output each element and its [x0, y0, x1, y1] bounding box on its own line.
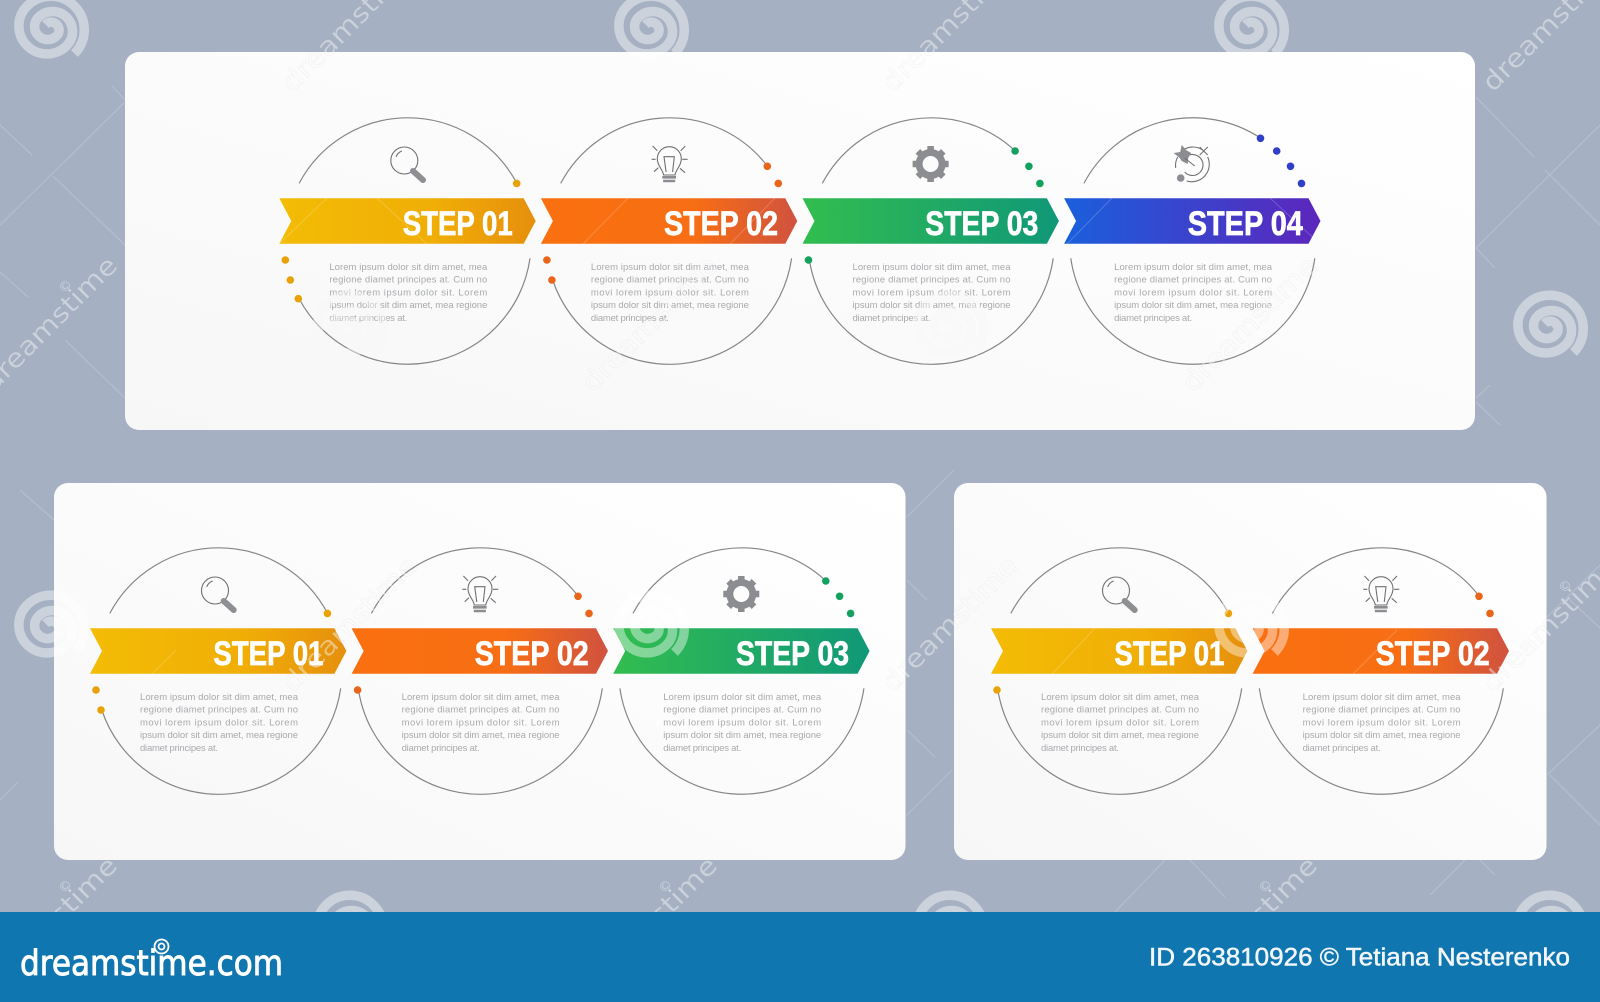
watermark text: ©: [356, 577, 376, 597]
arrow: [802, 198, 1059, 244]
arrow: [1253, 628, 1509, 674]
body text: [663, 692, 822, 754]
body text: [1303, 692, 1461, 754]
panel: three steps: [54, 483, 906, 860]
dots: [354, 592, 593, 694]
watermark text: ©: [56, 277, 76, 297]
arrow: [991, 628, 1247, 674]
watermark text: ©: [56, 877, 76, 897]
body text: regione diamet principes at. Cum no: [140, 705, 298, 716]
body text: diamet principes at.: [663, 743, 741, 754]
body text: diamet principes at.: [329, 313, 407, 324]
body text: movi lorem ipsum dolor sit. Lorem: [329, 287, 487, 298]
body text: Lorem ipsum dolor sit dim amet, mea: [329, 262, 488, 273]
body text: Lorem ipsum dolor sit dim amet, mea: [402, 692, 560, 703]
footer banner: [0, 912, 1600, 1002]
body text: Lorem ipsum dolor sit dim amet, mea: [591, 262, 750, 273]
lower arc: [809, 258, 1053, 364]
upper arc: [371, 548, 578, 613]
step 03: [802, 118, 1059, 364]
body text: regione diamet principes at. Cum no: [1114, 275, 1272, 286]
step 01: [279, 118, 536, 364]
lower arc: [1259, 688, 1503, 794]
image id and credit: ID 263810926 © Tetiana Nesterenko: [1149, 944, 1570, 972]
watermark text: ©: [1256, 277, 1276, 297]
upper arc: [633, 548, 826, 613]
body text: movi lorem ipsum dolor sit. Lorem: [1114, 287, 1272, 298]
watermark text: ©: [1556, 577, 1576, 597]
upper arc: [1011, 548, 1229, 613]
body text: movi lorem ipsum dolor sit. Lorem: [140, 717, 298, 728]
body text: [1041, 692, 1200, 754]
logo spiral: [154, 940, 168, 954]
body text: diamet principes at.: [1303, 743, 1381, 754]
body text: regione diamet principes at. Cum no: [663, 705, 821, 716]
watermark text: dreamstime: [877, 551, 1024, 698]
arrow: [279, 198, 536, 244]
body text: Lorem ipsum dolor sit dim amet, mea: [853, 262, 1011, 273]
dots: [822, 577, 854, 617]
body text: diamet principes at.: [1041, 743, 1119, 754]
body text: [329, 262, 488, 324]
lower arc: [358, 688, 602, 794]
step 02: [1253, 548, 1509, 794]
icon: light bulb: [652, 146, 688, 181]
dots: [92, 610, 331, 714]
arrow: [352, 628, 608, 674]
body text: movi lorem ipsum dolor sit. Lorem: [853, 287, 1011, 298]
lower arc: [998, 688, 1242, 794]
body text: [591, 262, 750, 324]
icon: gear: [913, 146, 949, 182]
upper arc: [1084, 118, 1261, 183]
body text: ipsum dolor sit dim amet, mea regione: [1114, 300, 1272, 311]
body text: movi lorem ipsum dolor sit. Lorem: [663, 717, 821, 728]
lower arc: [553, 258, 792, 364]
watermark text: dreamstime: [277, 551, 424, 698]
body text: [1114, 262, 1273, 324]
upper arc: [299, 118, 517, 183]
watermark text: ©: [1256, 877, 1276, 897]
step label: STEP 03: [736, 635, 849, 673]
icon: light bulb: [462, 576, 498, 611]
watermark text: dreamstime: [577, 251, 724, 398]
dots: [543, 162, 782, 284]
body text: ipsum dolor sit dim amet, mea regione: [853, 300, 1011, 311]
panel: two steps: [954, 483, 1546, 860]
panel background: [125, 52, 1475, 430]
body text: regione diamet principes at. Cum no: [591, 275, 749, 286]
body text: regione diamet principes at. Cum no: [853, 275, 1011, 286]
body text: ipsum dolor sit dim amet, mea regione: [140, 730, 298, 741]
icon: target with dart: [1174, 145, 1209, 182]
dots: [993, 610, 1232, 694]
step label: STEP 02: [475, 635, 589, 673]
body text: regione diamet principes at. Cum no: [402, 705, 560, 716]
watermark text: dreamstime: [1177, 251, 1324, 398]
body text: Lorem ipsum dolor sit dim amet, mea: [1114, 262, 1273, 273]
step label: STEP 01: [403, 205, 513, 243]
upper arc: [1272, 548, 1479, 613]
icon: magnifier: [202, 577, 234, 610]
body text: [852, 262, 1011, 324]
body text: diamet principes at.: [140, 743, 218, 754]
body text: ipsum dolor sit dim amet, mea regione: [329, 300, 487, 311]
body text: Lorem ipsum dolor sit dim amet, mea: [1303, 692, 1461, 703]
arrow: [90, 628, 346, 674]
watermark text: dreamstime: [577, 851, 724, 998]
body text: ipsum dolor sit dim amet, mea regione: [1303, 730, 1461, 741]
arrow: [613, 628, 870, 674]
banner background: [0, 912, 1600, 1002]
upper arc: [561, 118, 768, 183]
body text: ipsum dolor sit dim amet, mea regione: [402, 730, 560, 741]
body text: regione diamet principes at. Cum no: [1303, 705, 1461, 716]
faint spiral marks on panel: [306, 281, 997, 372]
body text: diamet principes at.: [591, 313, 669, 324]
body text: movi lorem ipsum dolor sit. Lorem: [591, 287, 749, 298]
panel background: [954, 483, 1546, 860]
body text: diamet principes at.: [402, 743, 480, 754]
watermark text: dreamstime: [1177, 851, 1324, 998]
logo text: dreamstime.com: [20, 944, 283, 984]
step label: STEP 01: [213, 635, 323, 673]
body text: [402, 692, 560, 754]
step 03: [613, 548, 870, 794]
body text: diamet principes at.: [853, 313, 931, 324]
watermark text: ©: [656, 277, 676, 297]
body text: movi lorem ipsum dolor sit. Lorem: [1303, 717, 1461, 728]
body text: movi lorem ipsum dolor sit. Lorem: [1041, 717, 1199, 728]
step 04: [1064, 118, 1320, 364]
body text: ipsum dolor sit dim amet, mea regione: [1041, 730, 1199, 741]
icon: gear: [723, 576, 759, 612]
dots: [282, 180, 520, 302]
step 02: [352, 548, 608, 794]
body text: Lorem ipsum dolor sit dim amet, mea: [1041, 692, 1200, 703]
watermark text: ©: [656, 877, 676, 897]
icon: magnifier: [1102, 577, 1135, 610]
lower arc: [1071, 258, 1315, 364]
icon: magnifier: [391, 147, 423, 180]
step 01: [90, 548, 346, 794]
body text: regione diamet principes at. Cum no: [1041, 705, 1199, 716]
step label: STEP 04: [1188, 205, 1303, 243]
upper arc: [822, 118, 1015, 183]
watermark text: ©: [956, 577, 976, 597]
lower arc: [102, 688, 341, 794]
body text: ipsum dolor sit dim amet, mea regione: [591, 300, 749, 311]
step label: STEP 02: [664, 205, 778, 243]
body text: diamet principes at.: [1114, 313, 1192, 324]
panel background: [54, 483, 906, 860]
icon: light bulb: [1363, 576, 1399, 611]
step 01: [991, 548, 1247, 794]
upper arc: [110, 548, 328, 613]
body text: ipsum dolor sit dim amet, mea regione: [663, 730, 821, 741]
body text: movi lorem ipsum dolor sit. Lorem: [402, 717, 560, 728]
dots: [805, 147, 1044, 264]
body text: Lorem ipsum dolor sit dim amet, mea: [140, 692, 299, 703]
step 02: [541, 118, 797, 364]
lower arc: [299, 258, 530, 364]
arrow: [1064, 198, 1320, 244]
dots: [1257, 134, 1305, 187]
dots: [1475, 592, 1494, 617]
step label: STEP 01: [1114, 635, 1224, 673]
step label: STEP 02: [1376, 635, 1490, 673]
lower arc: [620, 688, 864, 794]
arrow: [541, 198, 797, 244]
body text: regione diamet principes at. Cum no: [329, 275, 487, 286]
step label: STEP 03: [925, 205, 1038, 243]
body text: [140, 692, 299, 754]
body text: Lorem ipsum dolor sit dim amet, mea: [663, 692, 822, 703]
panel: four steps: [125, 52, 1475, 430]
